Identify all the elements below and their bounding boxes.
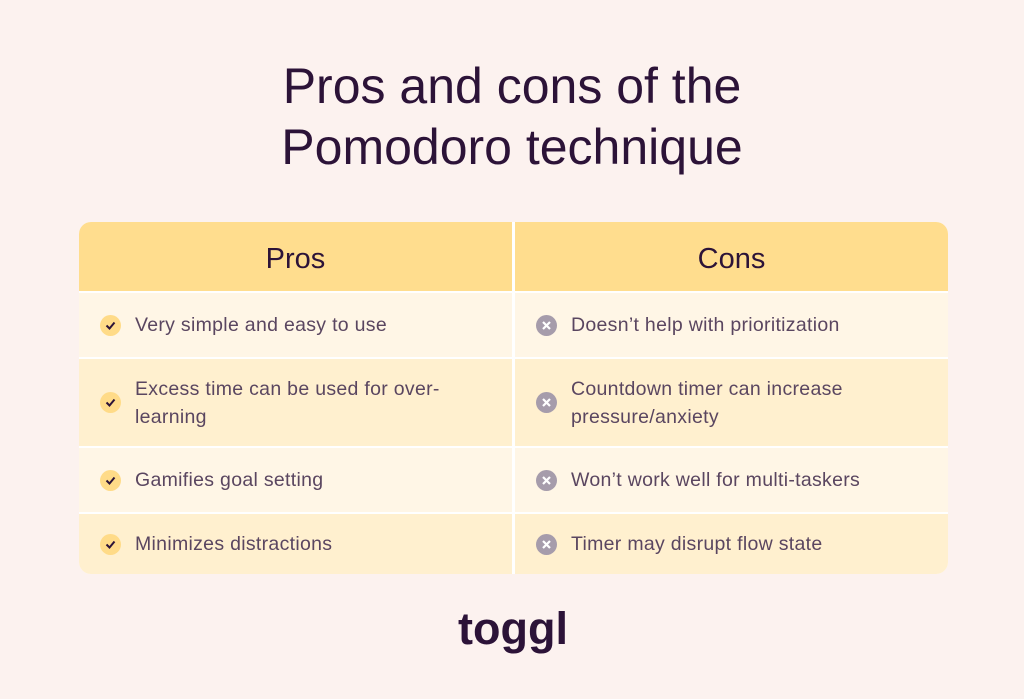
table [79,222,948,574]
header: pros [79,222,512,291]
con row 1: Doesn’t help with prioritization [571,314,840,336]
con row 4 [515,514,948,574]
pro row 1 [79,293,512,357]
pro row 3 [79,448,512,512]
header: pros: Pros [266,243,325,275]
header: cons: Cons [698,243,765,275]
pro row 4 [79,514,512,574]
title: Pomodoro technique [281,119,743,175]
logo: toggl [458,603,568,654]
con row 1 [515,293,948,357]
con row 4: Timer may disrupt flow state [571,533,822,555]
pro row 1: Very simple and easy to use [135,314,387,336]
pro row 2: learning [135,406,207,428]
title: Pros and cons of the [283,58,741,114]
con row 2: pressure/anxiety [571,406,719,428]
pro row 4: Minimizes distractions [135,533,332,555]
con row 3: Won’t work well for multi-taskers [571,469,860,491]
pro row 2: Excess time can be used for over- [135,378,440,400]
pro row 2 [79,359,512,446]
header: cons [515,222,948,291]
con row 3 [515,448,948,512]
pro row 3: Gamifies goal setting [135,469,323,491]
con row 2 [515,359,948,446]
con row 2: Countdown timer can increase [571,378,843,400]
title [281,58,743,175]
